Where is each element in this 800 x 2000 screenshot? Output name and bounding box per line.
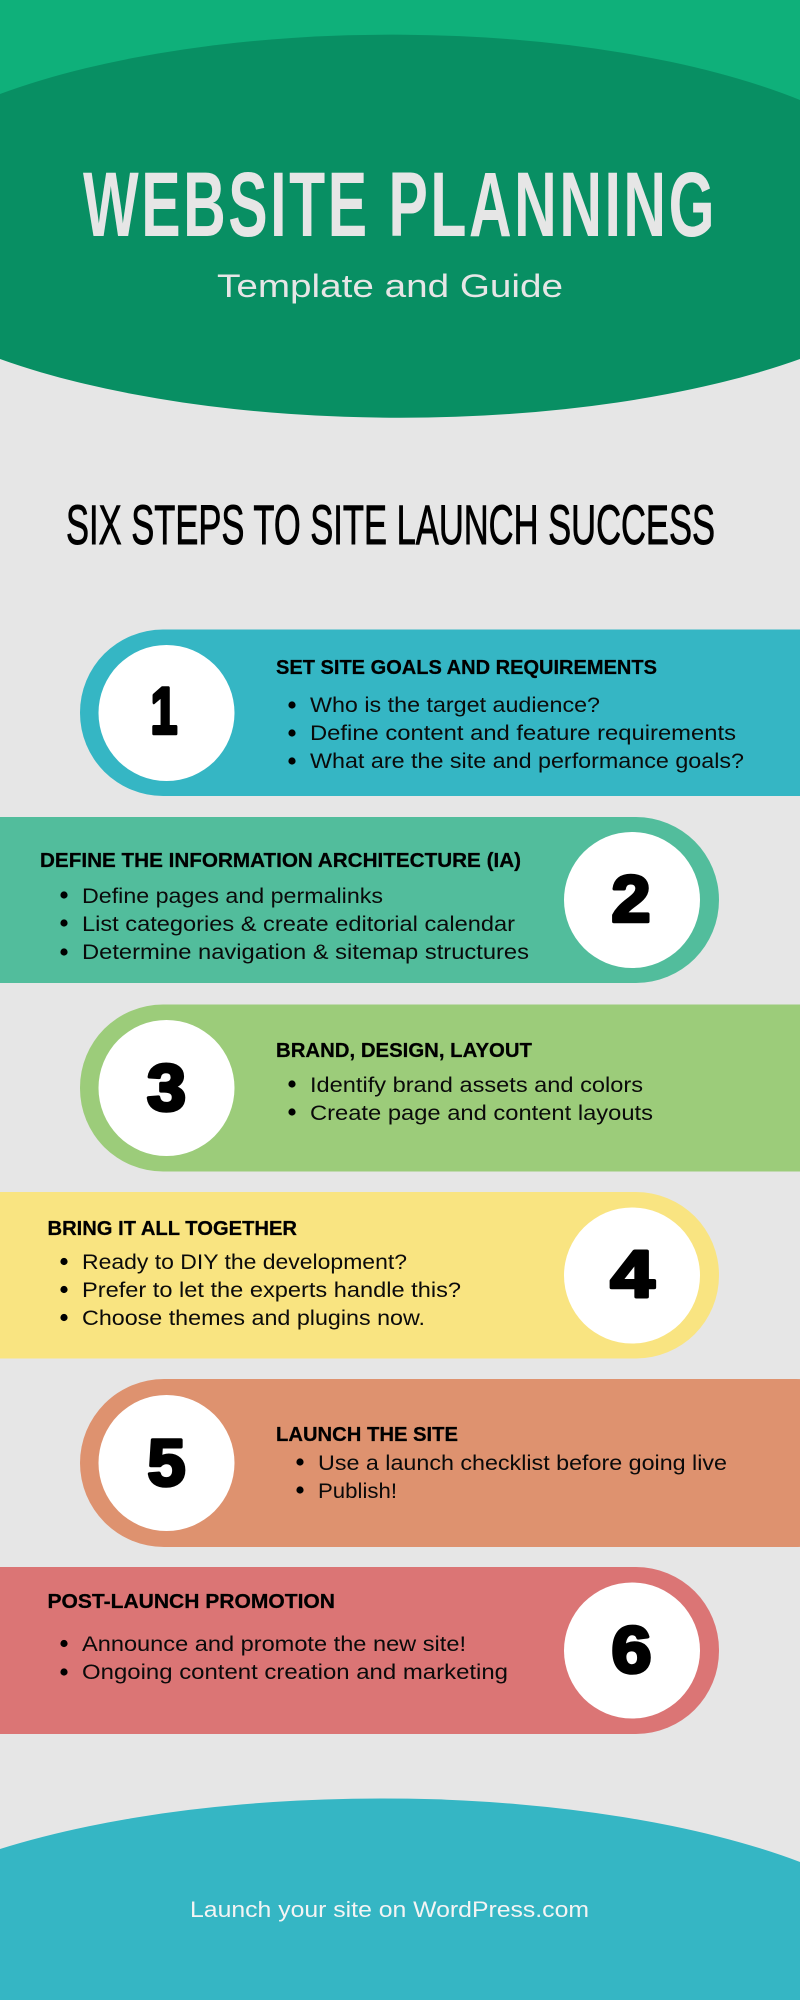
step 2 bullet list: Determine navigation & sitemap structures (82, 941, 529, 964)
step 3 bullet list (288, 1074, 653, 1125)
step 2 bullet list: Define pages and permalinks (82, 885, 383, 908)
panel: step 4 (0, 1192, 719, 1358)
step 1 bullet list: What are the site and performance goals? (310, 750, 744, 773)
panel: step 5 (80, 1379, 800, 1547)
step 4 bullet list: Choose themes and plugins now. (82, 1307, 425, 1330)
step 6 bullet list: Ongoing content creation and marketing (82, 1661, 508, 1684)
step 6 bullet list (60, 1633, 508, 1684)
step 5 heading: LAUNCH THE SITE (276, 1423, 458, 1446)
panel: step 6 (0, 1567, 719, 1734)
header panel: dark green ellipse (0, 35, 800, 418)
step 3 heading: BRAND, DESIGN, LAYOUT (276, 1039, 532, 1062)
step 5 bullet list: Use a launch checklist before going live (318, 1452, 727, 1475)
step 3 number badge (98, 1020, 234, 1156)
step 1 heading: SET SITE GOALS AND REQUIREMENTS (276, 656, 657, 679)
step 5 number badge: 5 (148, 1426, 186, 1500)
step 2 number badge: 2 (612, 862, 650, 936)
header band: light green top (0, 0, 800, 110)
footer text: Launch your site on WordPress.com (190, 1897, 589, 1922)
step 6 bullet list: Announce and promote the new site! (82, 1633, 466, 1656)
panel: step 1 (80, 630, 800, 796)
step 6 number badge: 6 (612, 1612, 652, 1686)
subtitle: Template and Guide (217, 268, 563, 304)
step 1 bullet list: Define content and feature requirements (310, 722, 736, 745)
step 1 bullet list (288, 694, 744, 773)
step 1 number badge: 1 (150, 674, 178, 748)
step 2 bullet list (60, 885, 529, 964)
step 4 heading: BRING IT ALL TOGETHER (48, 1217, 297, 1240)
step 4 bullet list (60, 1251, 461, 1330)
step 6 number badge (564, 1582, 700, 1718)
step 5 bullet list: Publish! (318, 1480, 397, 1503)
step 4 number badge: 4 (610, 1236, 655, 1310)
step 4 bullet list: Prefer to let the experts handle this? (82, 1279, 461, 1302)
step 1 bullet list: Who is the target audience? (310, 694, 600, 717)
panel: step 2 (0, 817, 719, 983)
step 6 heading: POST-LAUNCH PROMOTION (48, 1590, 335, 1613)
step 4 number badge (564, 1208, 700, 1344)
step 3 bullet list: Identify brand assets and colors (310, 1074, 643, 1097)
step 2 number badge (564, 832, 700, 968)
step 4 bullet list: Ready to DIY the development? (82, 1251, 407, 1274)
panel: step 3 (80, 1004, 800, 1172)
step 2 heading: DEFINE THE INFORMATION ARCHITECTURE (IA) (40, 849, 521, 872)
step 5 bullet list (296, 1452, 727, 1503)
step 5 number badge (98, 1395, 234, 1531)
step 3 bullet list: Create page and content layouts (310, 1102, 653, 1125)
step 1 number badge (98, 645, 234, 781)
step 2 bullet list: List categories & create editorial calendar (82, 913, 515, 936)
footer panel: teal arc (0, 1798, 800, 2000)
step 3 number badge: 3 (147, 1050, 186, 1124)
